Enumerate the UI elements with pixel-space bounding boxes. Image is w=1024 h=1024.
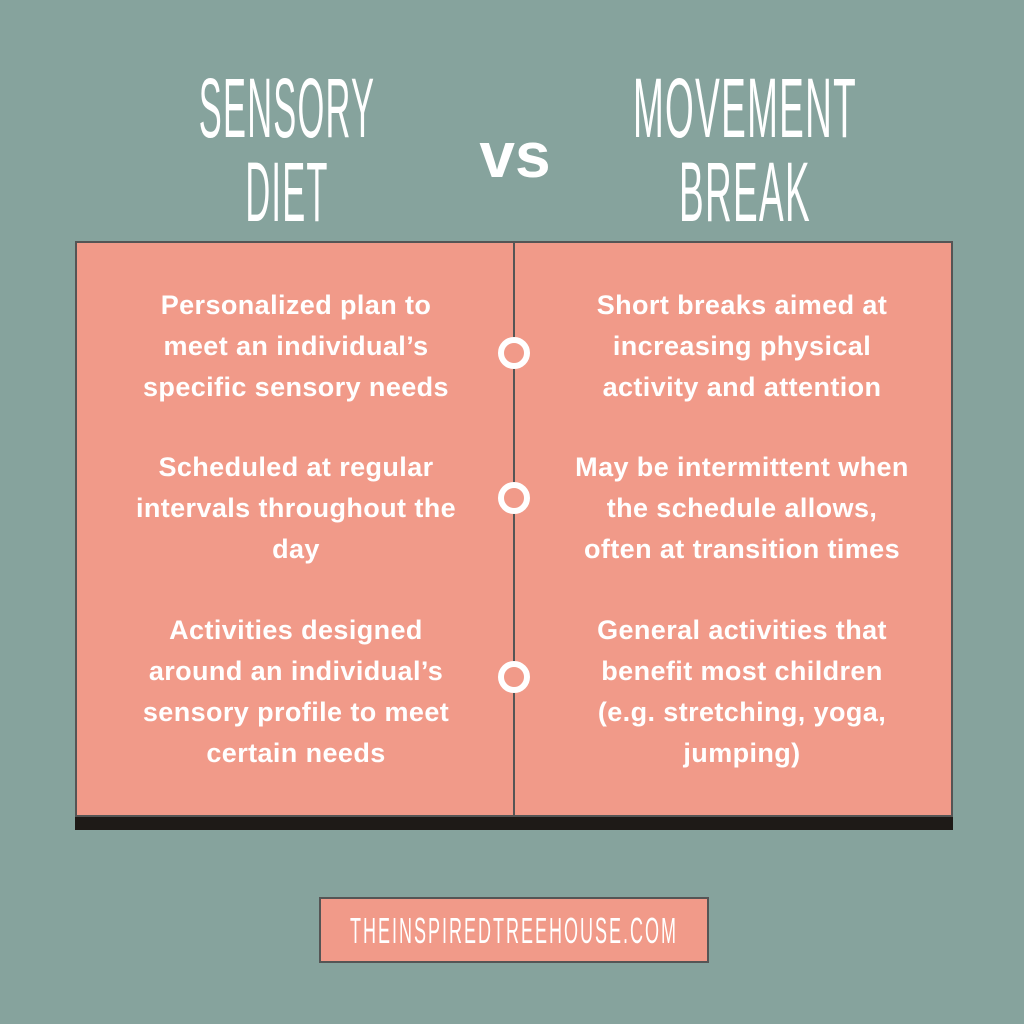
- right text 1: [597, 290, 887, 402]
- right text 3: General activities that: [597, 615, 887, 645]
- right text 1: increasing physical: [613, 331, 871, 361]
- right text 3: benefit most children: [601, 656, 883, 686]
- left text 1: specific sensory needs: [143, 372, 449, 402]
- left text 2: Scheduled at regular: [158, 452, 434, 482]
- left text 2: day: [272, 534, 320, 564]
- divider: [513, 241, 515, 817]
- title: sensory diet: SENSORY: [199, 61, 375, 155]
- left text 3: sensory profile to meet: [143, 697, 449, 727]
- left text 1: meet an individual’s: [163, 331, 429, 361]
- icon: dot 2: [498, 482, 530, 514]
- footer: website: THEINSPIREDTREEHOUSE.COM: [350, 910, 678, 951]
- table body: [75, 241, 953, 817]
- right text 2: May be intermittent when: [575, 452, 909, 482]
- left text 2: intervals throughout the: [136, 493, 456, 523]
- right text 1: activity and attention: [603, 372, 881, 402]
- right text 2: the schedule allows,: [607, 493, 877, 523]
- title: movement break: [633, 61, 857, 239]
- left text 2: [136, 452, 456, 564]
- left text 1: Personalized plan to: [161, 290, 431, 320]
- title: vs: vs: [479, 119, 551, 191]
- icon: dot 3: [498, 661, 530, 693]
- base bar: [75, 817, 953, 830]
- title: sensory diet: [199, 61, 375, 239]
- left text 3: [143, 615, 449, 768]
- right text 2: often at transition times: [584, 534, 900, 564]
- title: movement break: BREAK: [679, 145, 811, 239]
- footer: website: [319, 897, 709, 963]
- right text 1: Short breaks aimed at: [597, 290, 887, 320]
- right text 3: jumping): [683, 738, 801, 768]
- right text 3: [597, 615, 887, 768]
- title: movement break: MOVEMENT: [633, 61, 857, 155]
- left text 3: Activities designed: [169, 615, 423, 645]
- icon: dot 1: [498, 337, 530, 369]
- left text 3: certain needs: [206, 738, 386, 768]
- left text 1: [143, 290, 449, 402]
- right text 2: [575, 452, 909, 564]
- right text 3: (e.g. stretching, yoga,: [598, 697, 886, 727]
- panel: comparison table: [75, 241, 953, 830]
- left text 3: around an individual’s: [149, 656, 443, 686]
- title: sensory diet: DIET: [245, 145, 329, 239]
